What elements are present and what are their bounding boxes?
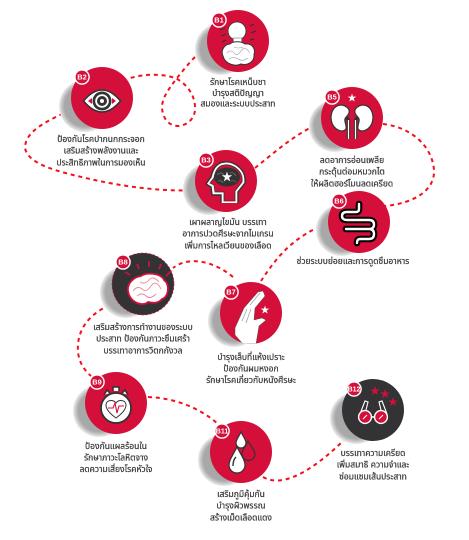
text: B11 benefits: สร้างเม็ดเลือดแดง (210, 512, 272, 522)
text: B1 benefits: บำรุงสติปัญญา (212, 88, 264, 98)
text: B2 benefits: ประสิทธิภาพในการมองเห็น (56, 157, 146, 167)
text: B12 benefits: ซ่อมแซมเส้นประสาท (339, 471, 407, 481)
icon: head with brain (206, 162, 245, 203)
text: B5 benefits: ลดอาการอ่อนเพลีย (320, 155, 384, 165)
text: B2 benefits: เสริมสร้างพลังงานและ (64, 146, 138, 156)
arrow: B9 to B11 (148, 397, 218, 424)
panel: B7 (206, 282, 296, 385)
icon: eye (84, 90, 120, 112)
text: B1 benefits: สมองและระบบประสาท (201, 99, 275, 109)
dashed connector path (25, 47, 434, 481)
badge: B7: B7 (226, 288, 236, 297)
badge: B9: B9 (92, 378, 102, 387)
text: B9 benefits: ป้องกันแผลร้อนใน (85, 441, 147, 451)
arrow: B2 to B3 (25, 110, 197, 190)
badge: B11: B11 (216, 429, 228, 436)
icon: glasses and stars (359, 386, 398, 423)
arrow: B8 to B9 (78, 302, 117, 376)
icon: brain with sparks (125, 261, 171, 304)
icon: intestines (342, 204, 374, 243)
panel: B6 (297, 191, 409, 267)
icon: blood drops (229, 432, 255, 473)
text: B5 benefits: ให้ผลิตฮอร์โมนลดเครียด (311, 178, 393, 188)
text: B11 benefits: บำรุงผิวพรรณ (217, 501, 265, 511)
panel: B12 (330, 379, 409, 481)
badge: B6: B6 (334, 197, 344, 206)
badge: B3: B3 (201, 156, 211, 165)
text: B7 benefits: บำรุงเล็บที่แห้งเปราะ (217, 351, 285, 362)
text: B7 benefits: ป้องกันผมหงอก (223, 364, 279, 374)
panel: B1 (195, 10, 275, 109)
text: B9 benefits: รักษาภาวะโลหิตจาง (84, 452, 148, 462)
text: B8 benefits: ประสาท ป้องกันภาวะซึมเศร้า (96, 334, 190, 344)
arrow: B11 to B12 (263, 434, 350, 481)
text: B9 benefits: ลดความเสี่ยงโรคหัวใจ (80, 463, 152, 474)
text: B8 benefits: บรรเทาอาการวิตกกังวล (104, 345, 183, 355)
text: B2 benefits: ป้องกันโรคปากนกกระจอก (57, 134, 145, 144)
text: B7 benefits: รักษาโรคเกี่ยวกับหนังศีรษะ (206, 374, 296, 385)
badge: B2: B2 (77, 73, 87, 82)
icon: star (348, 94, 356, 102)
badge: B12: B12 (348, 387, 361, 394)
text: B3 benefits: เพิ่มการไหลเวียนของเลือด (185, 240, 271, 250)
text: B11 benefits: เสริมภูมิคุ้มกัน (217, 489, 265, 500)
badge: B1: B1 (214, 16, 224, 25)
icon: kidneys (331, 105, 373, 139)
text: B1 benefits: รักษาโรคเหน็บชา (210, 77, 266, 87)
badge: B5: B5 (327, 93, 337, 102)
text: B12 benefits: เพิ่มสมาธิ ความจำและ (337, 459, 409, 470)
panel: B9 (73, 372, 152, 474)
panel: B5 (309, 87, 393, 188)
icon: hand with star (235, 291, 269, 344)
arrow: B5 to B6 (383, 124, 434, 206)
arrow: B3 to B5 (255, 123, 320, 168)
badge: B8: B8 (118, 258, 128, 267)
text: B5 benefits: กระตุ้นต่อมหมวกไต (319, 167, 385, 177)
text: B8 benefits: เสริมสร้างการทำงานของระบบ (93, 322, 193, 332)
icon: star (222, 172, 232, 181)
arrow: B7 to B8 (173, 261, 233, 277)
text: B6 benefit: ช่วยระบบย่อยและการดูดซึมอาหาร (297, 256, 409, 267)
icon: light bulb and brain (220, 22, 256, 65)
panel: B11 (198, 421, 272, 522)
panel: B8 (93, 253, 193, 355)
icon: stopwatch heart (101, 387, 131, 423)
text: B3 benefits: อาการปวดศีรษะจากไมเกรน (182, 229, 274, 239)
text: B3 benefits: เผาผลาญไขมัน บรรเทา (189, 217, 267, 227)
panel: B2 (56, 67, 146, 167)
arrow: B1 loop to B2 (127, 47, 207, 126)
arrow: B6 to B7 (261, 223, 327, 281)
text: B12 benefits: บรรเทาความเครียด (341, 448, 405, 458)
panel: B3 (182, 150, 274, 250)
